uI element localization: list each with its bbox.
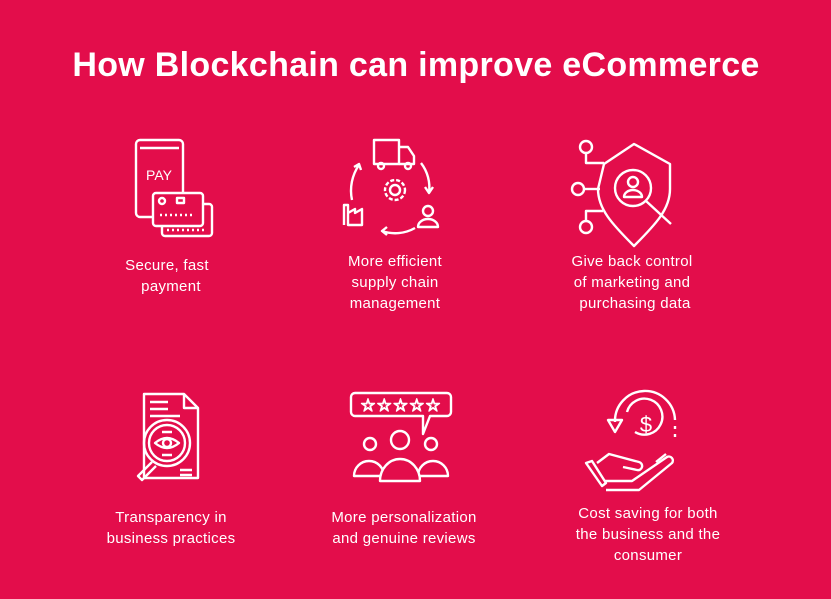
icon: reviews bbox=[351, 393, 451, 481]
icon: cost saving: $ bbox=[640, 412, 652, 437]
icon: pay: PAY bbox=[146, 167, 173, 183]
caption: data control: of marketing and bbox=[574, 274, 690, 291]
title: How Blockchain can improve eCommerce bbox=[72, 46, 760, 84]
icon: pay bbox=[136, 140, 212, 236]
caption: reviews bbox=[331, 509, 477, 547]
caption: data control: purchasing data bbox=[579, 295, 691, 312]
caption: transparency: Transparency in bbox=[115, 509, 227, 526]
caption: supply chain bbox=[348, 253, 443, 312]
icon: data control bbox=[572, 141, 671, 246]
caption: transparency bbox=[107, 509, 235, 547]
icon: transparency bbox=[138, 394, 198, 480]
caption: reviews: and genuine reviews bbox=[332, 530, 476, 547]
caption: data control bbox=[572, 253, 692, 312]
icon: reviews: ☆☆☆☆☆ bbox=[360, 396, 442, 415]
caption: data control: Give back control bbox=[572, 253, 692, 270]
caption: cost saving bbox=[576, 505, 720, 564]
caption: reviews: More personalization bbox=[331, 509, 477, 526]
caption: supply chain: More efficient bbox=[348, 253, 443, 270]
caption: cost saving: the business and the bbox=[576, 526, 720, 543]
caption: pay: payment bbox=[141, 278, 201, 295]
icon: cost saving bbox=[586, 391, 675, 490]
caption: cost saving: Cost saving for both bbox=[578, 505, 718, 522]
caption: cost saving: consumer bbox=[614, 547, 682, 564]
caption: transparency: business practices bbox=[107, 530, 235, 547]
caption: supply chain: supply chain bbox=[352, 274, 438, 291]
caption: pay: Secure, fast bbox=[125, 257, 209, 274]
icon: supply chain bbox=[344, 140, 438, 235]
caption: pay bbox=[125, 257, 209, 295]
caption: supply chain: management bbox=[350, 295, 441, 312]
